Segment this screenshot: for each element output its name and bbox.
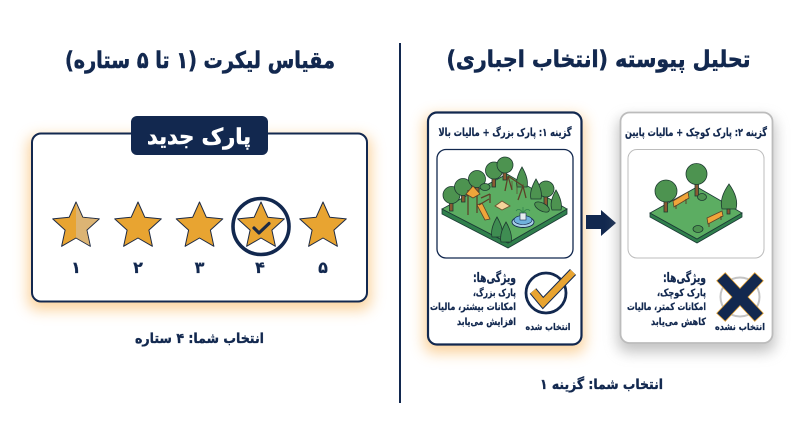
bench: [707, 211, 723, 227]
text: your choice option 1: انتخاب شما: گزینه ۱: [540, 376, 663, 393]
not selected label: انتخاب نشده: [715, 322, 765, 333]
star 2: [115, 202, 161, 246]
title: likert scale: مقیاس لیکرت (۱ تا ۵ ستاره): [65, 48, 335, 74]
star 3: [176, 202, 223, 246]
hedges: [480, 184, 490, 190]
text: your choice 4 stars: انتخاب شما: ۴ ستاره: [135, 331, 264, 347]
illustration: small park: [628, 150, 764, 258]
star numbers: [71, 258, 328, 277]
features text option 2: پارک کوچک،: [657, 288, 706, 299]
star 4 selected: [233, 198, 289, 254]
star numbers: ۴: [255, 258, 265, 277]
option 1 heading: گزینه ۱: پارک بزرگ + مالیات بالا: [439, 125, 572, 139]
selected label: انتخاب شده: [526, 322, 570, 333]
star numbers: ۵: [318, 258, 328, 277]
playground with slide: [466, 186, 490, 220]
features text option 2: ویژگی‌ها:: [663, 270, 706, 286]
features text option 2: کاهش می‌یابد: [651, 317, 706, 328]
features text option 2: امکانات کمتر، مالیات: [627, 302, 706, 313]
selected check icon: [526, 272, 573, 333]
swing set: [505, 176, 526, 200]
features text option 1: امکانات بیشتر، مالیات: [430, 302, 516, 313]
star 1: [53, 202, 99, 246]
sandbox: [495, 201, 510, 210]
star numbers: ۲: [133, 258, 143, 277]
option 2 heading: گزینه ۲: پارک کوچک + مالیات پایین: [625, 126, 767, 139]
star numbers: ۱: [71, 258, 81, 277]
trees: [664, 194, 668, 212]
features text option 1: افزایش می‌یابد: [457, 317, 516, 328]
fountain: [512, 207, 534, 228]
panel: option 1 card: [424, 112, 585, 353]
panel: option 2 card: [618, 112, 775, 352]
arrow between options: [586, 210, 616, 236]
badge: new park: پارک جدید: [147, 125, 251, 150]
star rating row: [53, 198, 346, 254]
features text option 1: پارک بزرگ،: [473, 286, 516, 299]
title: continuous analysis: تحلیل پیوسته (انتخاب اجباری): [446, 47, 750, 73]
badge: new park: [131, 116, 268, 155]
star 5: [300, 202, 346, 246]
star numbers: ۳: [195, 258, 205, 277]
divider between sections: [399, 43, 401, 403]
features text option 1: [430, 270, 516, 328]
trees: [443, 157, 561, 242]
bushes: [698, 194, 706, 200]
panel: likert new park card: [28, 116, 371, 310]
bench: [673, 192, 689, 209]
features text option 2: [627, 270, 706, 328]
features text option 1: ویژگی‌ها:: [473, 270, 516, 286]
illustration: large park: [437, 150, 573, 258]
not selected x icon: [715, 278, 765, 333]
